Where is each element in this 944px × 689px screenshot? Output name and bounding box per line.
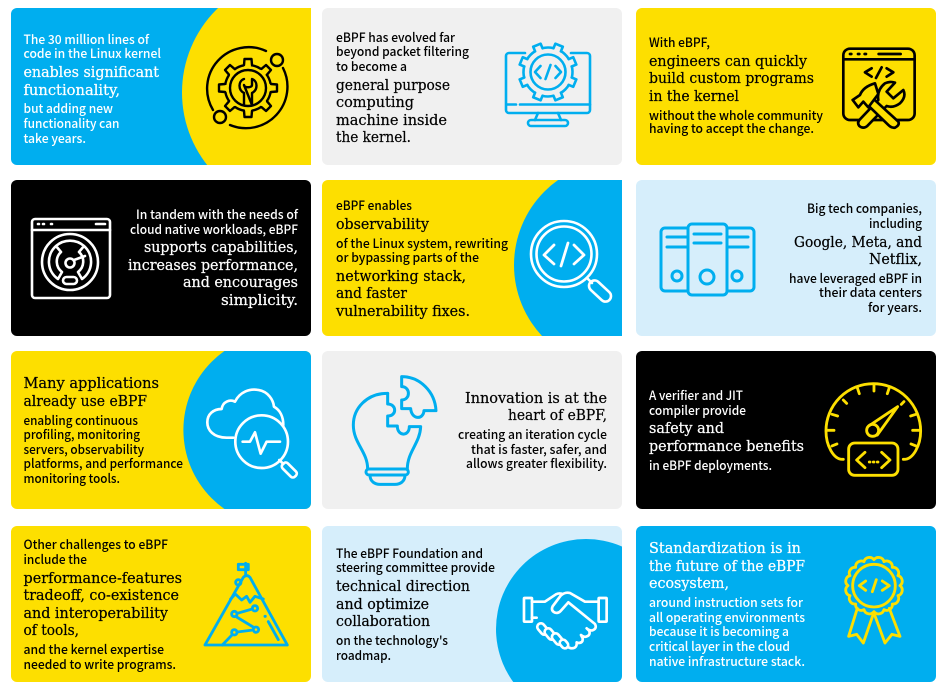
text: verifier and JIT compiler: safety and [649,420,725,437]
text: observability: and faster [336,285,408,302]
text: custom kernel programs: With eBPF, [649,32,710,51]
text: foundation and steering committee: The eBPF Foundation and [336,543,483,562]
icon: gear with wrench [207,47,287,128]
text: big tech adoption: have leveraged eBPF in [789,268,922,287]
text: observability: vulnerability fixes. [335,303,470,320]
text: cloud native workloads [128,204,299,309]
panel: kernel code size [11,8,311,165]
text: big tech adoption [789,198,923,316]
text: general purpose computing [336,27,470,146]
text: challenges: and the kernel expertise [24,639,164,658]
text: foundation and steering committee: steering committee provide [336,557,495,576]
text: kernel code size: code in the Linux kernel [24,43,161,62]
text: big tech adoption: for years. [868,297,922,316]
text: kernel code size: but adding new [24,98,114,117]
text: custom kernel programs: having to accept the change. [649,118,814,137]
text: kernel code size: functionality, [24,82,120,99]
text: general purpose computing: the kernel. [336,129,411,146]
text: verifier and JIT compiler: in eBPF deployments. [649,455,772,474]
text: innovation [458,390,607,472]
text: applications: profiling, monitoring [24,424,141,443]
text: kernel code size: enables significant [24,64,159,81]
text: big tech adoption: Google, Meta, and [794,234,922,251]
text: standardization: because it is becoming a [649,621,789,640]
icon: servers [661,224,754,295]
text: innovation: heart of eBPF, [508,407,607,424]
text: observability: or bypassing parts of the [336,247,479,266]
icon: light bulb with puzzle piece [353,377,436,484]
text: applications: already use eBPF [24,393,147,410]
panel: foundation and steering committee [322,526,622,682]
icon: window with gauge [32,219,110,298]
panel: cloud native workloads [11,180,311,336]
icon: monitor with gear [506,40,590,126]
text: challenges: and interoperability [24,605,169,622]
text: general purpose computing: to become a [336,56,407,75]
panel: applications [11,351,311,509]
text: cloud native workloads: supports capabilities, [144,239,298,256]
text: applications: enabling continuous [24,410,138,429]
text: foundation and steering committee: roadmap. [336,645,391,664]
text: innovation: creating an iteration cycle [458,424,607,443]
text: standardization: all operating environments [649,607,805,626]
text: cloud native workloads: cloud native workloads, eBPF [130,219,298,238]
text: challenges: tradeoff, co-existence [24,587,179,604]
text: general purpose computing: machine inside [336,112,447,129]
text: verifier and JIT compiler: performance benefits [649,438,804,455]
text: observability: eBPF enables [336,195,412,214]
text: challenges: needed to write programs. [24,654,176,673]
icon: mountain with flag and network [205,563,287,645]
text: innovation: allows greater flexibility. [466,453,607,472]
panel: general purpose computing [322,8,622,165]
text: general purpose computing: computing [336,94,415,111]
icon: award ribbon with code [846,557,902,643]
panel: big tech adoption [636,180,936,336]
text: verifier and JIT compiler: A verifier and JIT [649,385,743,404]
text: standardization [649,540,805,670]
text: custom kernel programs: engineers can quickly [649,53,808,70]
text: custom kernel programs: build custom programs [649,70,814,87]
panel: verifier and JIT compiler [636,351,936,509]
text: kernel code size [24,29,161,147]
text: custom kernel programs [649,32,823,137]
icon: magnifier with code [531,221,613,304]
text: big tech adoption: including [869,213,923,232]
text: challenges: Other challenges to eBPF [24,534,168,553]
text: challenges [24,534,182,673]
text: foundation and steering committee: on the technology's [336,630,448,649]
panel: challenges [11,526,311,682]
text: applications [24,375,183,487]
text: kernel code size: take years. [24,128,86,147]
text: innovation: that is faster, safer, and [471,439,607,458]
text: standardization: around instruction sets for [649,592,804,611]
icon: speedometer with code [826,384,921,475]
text: cloud native workloads: In tandem with the needs of [136,204,299,223]
text: cloud native workloads: simplicity. [221,292,298,309]
text: applications: platforms, and performance [24,453,183,472]
text: big tech adoption: Netflix, [869,251,922,268]
text: challenges: include the [24,549,87,568]
text: foundation and steering committee: collaboration [336,613,430,630]
panel: standardization [636,526,936,682]
icon: window with hammer and wrench [843,49,915,128]
text: verifier and JIT compiler [649,385,804,474]
text: general purpose computing: beyond packet filtering [336,41,470,60]
text: challenges: of tools, [24,622,79,639]
text: applications: Many applications [24,375,159,392]
text: custom kernel programs: without the whole community [649,105,823,124]
text: applications: monitoring tools. [24,468,120,487]
text: observability [335,195,509,320]
text: cloud native workloads: and encourages [183,274,298,291]
panel: observability [322,180,622,336]
text: standardization: critical layer in the cloud [649,636,790,655]
text: challenges: performance-features [24,570,182,587]
icon: handshake [524,593,607,650]
text: kernel code size: functionality can [24,113,120,132]
text: standardization: the future of the eBPF [649,558,805,575]
text: foundation and steering committee: technical direction [336,578,470,595]
text: custom kernel programs: in the kernel [649,88,739,105]
text: big tech adoption: their data centers [819,282,922,301]
text: general purpose computing: eBPF has evolved far [336,27,456,46]
text: cloud native workloads: increases performance, [128,257,298,274]
text: standardization: native infrastructure stack. [649,651,805,670]
text: verifier and JIT compiler: compiler provide [649,400,746,419]
text: big tech adoption: Big tech companies, [807,198,922,217]
text: observability: networking stack, [336,268,466,285]
text: standardization: ecosystem, [649,575,729,592]
text: general purpose computing: general purpose [336,77,450,94]
text: applications: servers, observability [24,439,144,458]
icon: cloud and magnifier [207,390,298,479]
text: innovation: Innovation is at the [465,390,607,407]
panel: innovation [322,351,622,509]
text: foundation and steering committee: and optimize [336,596,429,613]
text: foundation and steering committee [336,543,495,664]
text: observability: of the Linux system, rewriting [336,233,509,252]
panel: custom kernel programs [636,8,936,165]
text: observability: observability [336,216,430,233]
text: standardization: Standardization is in [649,540,801,557]
text: kernel code size: The 30 million lines of [24,29,150,48]
